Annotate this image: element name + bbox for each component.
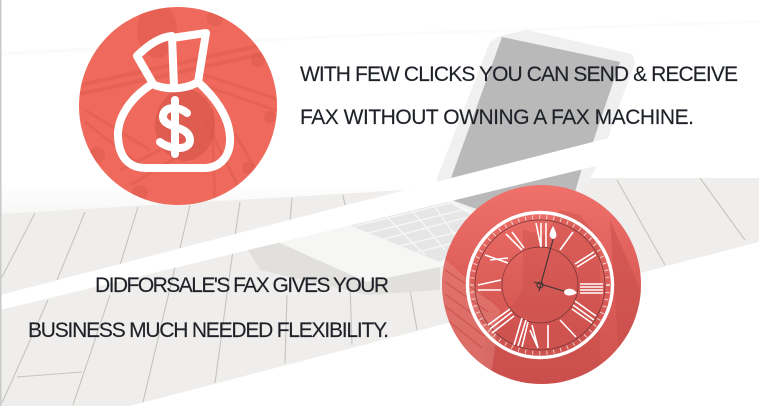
bag outline — [118, 33, 230, 168]
text: send and receive statement — [300, 63, 738, 129]
laptop keyboard and base — [273, 195, 530, 282]
banknote texture — [80, 2, 280, 205]
text: flexibility statement: DIDFORSALE'S FAX GIVES YOUR — [95, 274, 389, 297]
laptop screen and bezel — [437, 30, 635, 225]
text: flexibility statement: BUSINESS MUCH NEEDED FLEXIBILITY. — [28, 319, 389, 342]
clock hands — [534, 236, 570, 293]
roman numerals — [478, 223, 603, 348]
dollar sign — [160, 108, 190, 148]
text: send and receive statement: WITH FEW CLICKS YOU CAN SEND & RECEIVE — [300, 63, 738, 86]
text: send and receive statement: FAX WITHOUT OWNING A FAX MACHINE. — [300, 106, 694, 129]
icon: clock circle — [442, 185, 645, 384]
icon: money bag circle — [79, 2, 280, 205]
white diagonal band — [0, 100, 759, 310]
white lower triangle — [130, 242, 759, 406]
clock rings — [468, 212, 612, 358]
building texture — [442, 210, 645, 384]
text: flexibility statement — [28, 274, 389, 342]
